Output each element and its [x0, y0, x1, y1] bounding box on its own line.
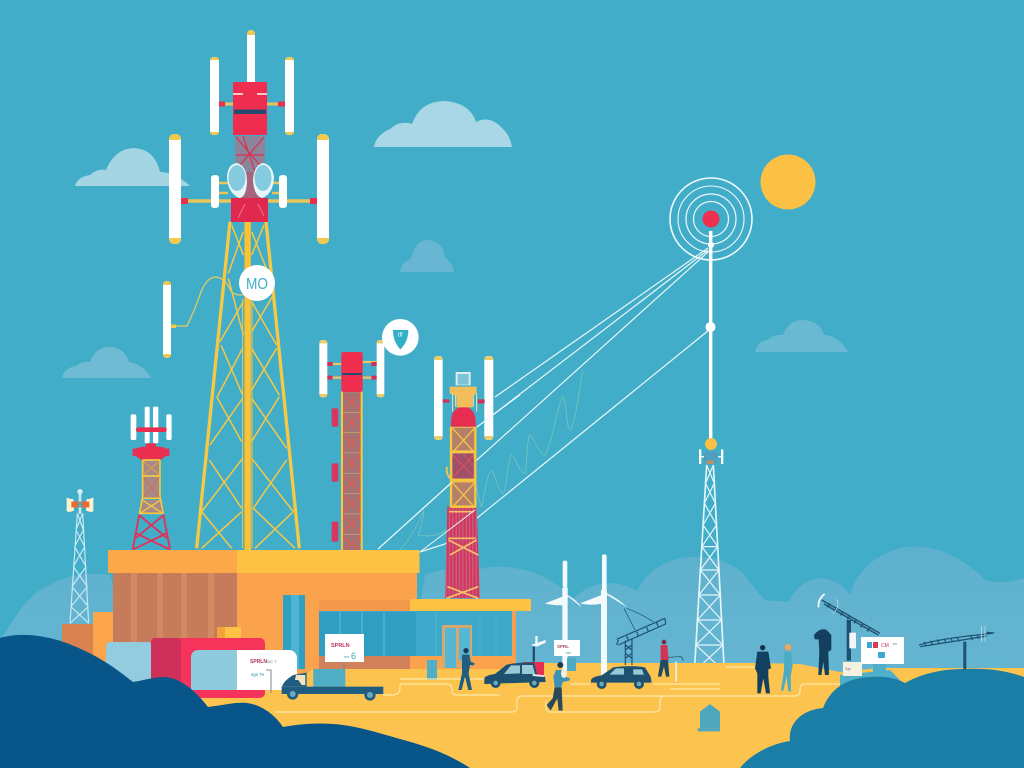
red beacon: [702, 210, 720, 228]
white trailer: SPRLN: [250, 659, 267, 665]
yellow lattice: [139, 460, 163, 514]
post: [625, 638, 632, 665]
tower lattice: [197, 218, 299, 550]
small yellow crate: [217, 627, 241, 638]
oval dish left: [227, 163, 247, 198]
middle lattice: [450, 427, 476, 507]
cargo: [313, 669, 345, 687]
boom: [617, 618, 666, 645]
MO badge: [239, 265, 275, 301]
central mast: [238, 218, 257, 550]
boom: [919, 633, 993, 647]
grey fill: [141, 461, 162, 513]
dark blue hill left: [0, 635, 470, 768]
red dome: [451, 407, 476, 427]
signal rings: [670, 178, 752, 260]
faint wave line: [400, 370, 583, 550]
inner rails: [243, 298, 252, 548]
lattice: [70, 513, 89, 623]
car 2: [591, 666, 652, 689]
car 1: [484, 663, 546, 688]
side brown block: [62, 624, 93, 664]
small notice: [843, 662, 862, 676]
blue base: [840, 670, 900, 695]
top centre antenna: [247, 30, 255, 84]
red equipment box: [231, 198, 268, 222]
arm clamps: [181, 198, 317, 204]
person walking centre: [547, 662, 570, 711]
signal wires: [378, 248, 709, 552]
tip: [987, 632, 996, 635]
yellow ball: [705, 438, 717, 450]
pole: [847, 620, 851, 661]
cloud: small centre: [400, 240, 454, 272]
dark band: [234, 110, 266, 114]
main tower: [163, 30, 329, 550]
MO badge: MO: [246, 276, 268, 293]
top antenna: [699, 449, 723, 464]
right antenna on hill: [919, 626, 996, 669]
head details: [233, 93, 267, 95]
cloud: top centre: [374, 101, 512, 147]
upper arms: [219, 102, 285, 106]
turbine 2: [580, 554, 627, 675]
small notice: Sgn: [845, 667, 851, 671]
upper left antenna: [210, 57, 219, 135]
small inner antennas: [211, 175, 287, 208]
white trailer: 28C T: [266, 659, 277, 664]
white antennas: [434, 356, 493, 440]
mast nodes: [706, 242, 716, 332]
legs: [694, 465, 724, 672]
upper right antenna: [285, 57, 294, 135]
large left antenna: [169, 134, 181, 244]
red head: [341, 352, 363, 392]
cloud: upper left: [75, 148, 190, 186]
sign post: [873, 664, 886, 679]
store roof: [410, 599, 531, 611]
pole: [963, 642, 966, 669]
person in blue: [781, 644, 793, 691]
beacon dot: [77, 489, 83, 494]
lower braces: [447, 512, 478, 598]
bin: [427, 660, 437, 680]
badge with shield icon: tlf: [398, 333, 403, 339]
oval dish right: [253, 163, 274, 198]
red container: [151, 638, 265, 698]
ground circuit lines: [275, 667, 840, 712]
short arms: [219, 183, 279, 193]
sign by turbine: SPRL: [557, 644, 569, 649]
antenna tips: [169, 30, 329, 244]
top screen: [456, 372, 471, 385]
turbine 1: [545, 561, 582, 671]
side orange block: [93, 612, 113, 662]
red legs: [133, 515, 170, 549]
side antenna: [163, 281, 171, 358]
large sign: [861, 637, 904, 664]
cloud: lower left: [62, 347, 151, 378]
side handle: [447, 467, 450, 478]
storefront sign: 6: [351, 651, 356, 661]
upper lattice: [235, 136, 265, 199]
flatbed truck: [282, 669, 383, 701]
dish: [818, 594, 825, 607]
arm clamps: [327, 362, 377, 380]
small blue box: [567, 658, 576, 671]
sun: [760, 154, 816, 210]
containers: [106, 627, 297, 698]
small house icon: [698, 704, 720, 731]
upper arm clamps: [219, 102, 285, 106]
antennas: [319, 340, 384, 397]
arm clamps: [443, 399, 485, 403]
door: [442, 625, 472, 668]
tower legs: [197, 222, 299, 548]
side antenna tips and clamp: [163, 281, 176, 358]
re-drawn wires over tower: [378, 395, 520, 552]
fins: [982, 626, 985, 642]
mast pole: [709, 231, 712, 441]
cables: [624, 608, 653, 630]
antenna pair: [67, 494, 93, 514]
red head: [133, 427, 169, 461]
small pole sign: [531, 636, 546, 662]
large sign: BN: [893, 642, 897, 646]
red head: [233, 82, 267, 135]
storefront sign: SPRLN: [331, 643, 350, 649]
teal hill right: [740, 669, 1024, 768]
boom: [822, 600, 880, 635]
large sign: CM: [881, 643, 889, 649]
storefront sign: ms: [344, 654, 349, 659]
column edges: [342, 392, 362, 552]
person walking left: [458, 648, 475, 690]
small red tower: [131, 407, 172, 549]
person dark suit: [755, 645, 771, 693]
orange wall: [237, 572, 516, 690]
small left lattice tower: [67, 489, 93, 623]
side boxes: [332, 408, 338, 542]
cab window: [295, 675, 305, 685]
long arms: [181, 199, 317, 203]
crane antenna: [818, 594, 880, 661]
white antennas: [131, 407, 172, 443]
white box: [849, 633, 856, 648]
lattice column: [341, 392, 362, 552]
red lower section: [445, 507, 480, 598]
brown wall: [113, 572, 237, 650]
head detail: [342, 371, 362, 377]
flatbed: [282, 687, 383, 694]
person with camera: [814, 629, 831, 675]
roof right: [237, 550, 420, 573]
storefront sign: [325, 634, 364, 670]
right mast with signal rings: [670, 178, 752, 450]
white trailer: [191, 650, 297, 693]
arms: [327, 362, 377, 378]
cab: [282, 673, 307, 688]
feed wire: [171, 277, 246, 326]
wheels: [287, 688, 376, 701]
large right antenna: [317, 134, 329, 244]
braces: [694, 465, 724, 672]
main building: [62, 550, 531, 690]
right lattice tower: [694, 449, 724, 672]
roof left: [108, 550, 237, 573]
person in red: [658, 640, 683, 682]
tower with dome: [434, 356, 493, 598]
blue column: [283, 595, 305, 669]
wind turbines: [545, 554, 627, 675]
dish arcs: [833, 599, 838, 613]
light blue container: [106, 642, 152, 698]
sign by turbine: sm: [566, 650, 572, 655]
wall stripes: [134, 572, 211, 650]
house base: [698, 728, 720, 731]
diagonal braces: [202, 225, 295, 548]
badge with shield icon: [382, 319, 419, 356]
sign by turbine: [554, 640, 580, 656]
white trailer: sgn Te: [251, 672, 265, 677]
red cargo box: [522, 662, 544, 676]
yellow equipment: [450, 387, 477, 412]
ground: [190, 663, 1024, 768]
background hills: [0, 547, 1024, 690]
storefront: [319, 600, 516, 669]
middle tower: [319, 319, 419, 552]
crane: [617, 608, 666, 665]
cloud: right: [755, 320, 848, 352]
